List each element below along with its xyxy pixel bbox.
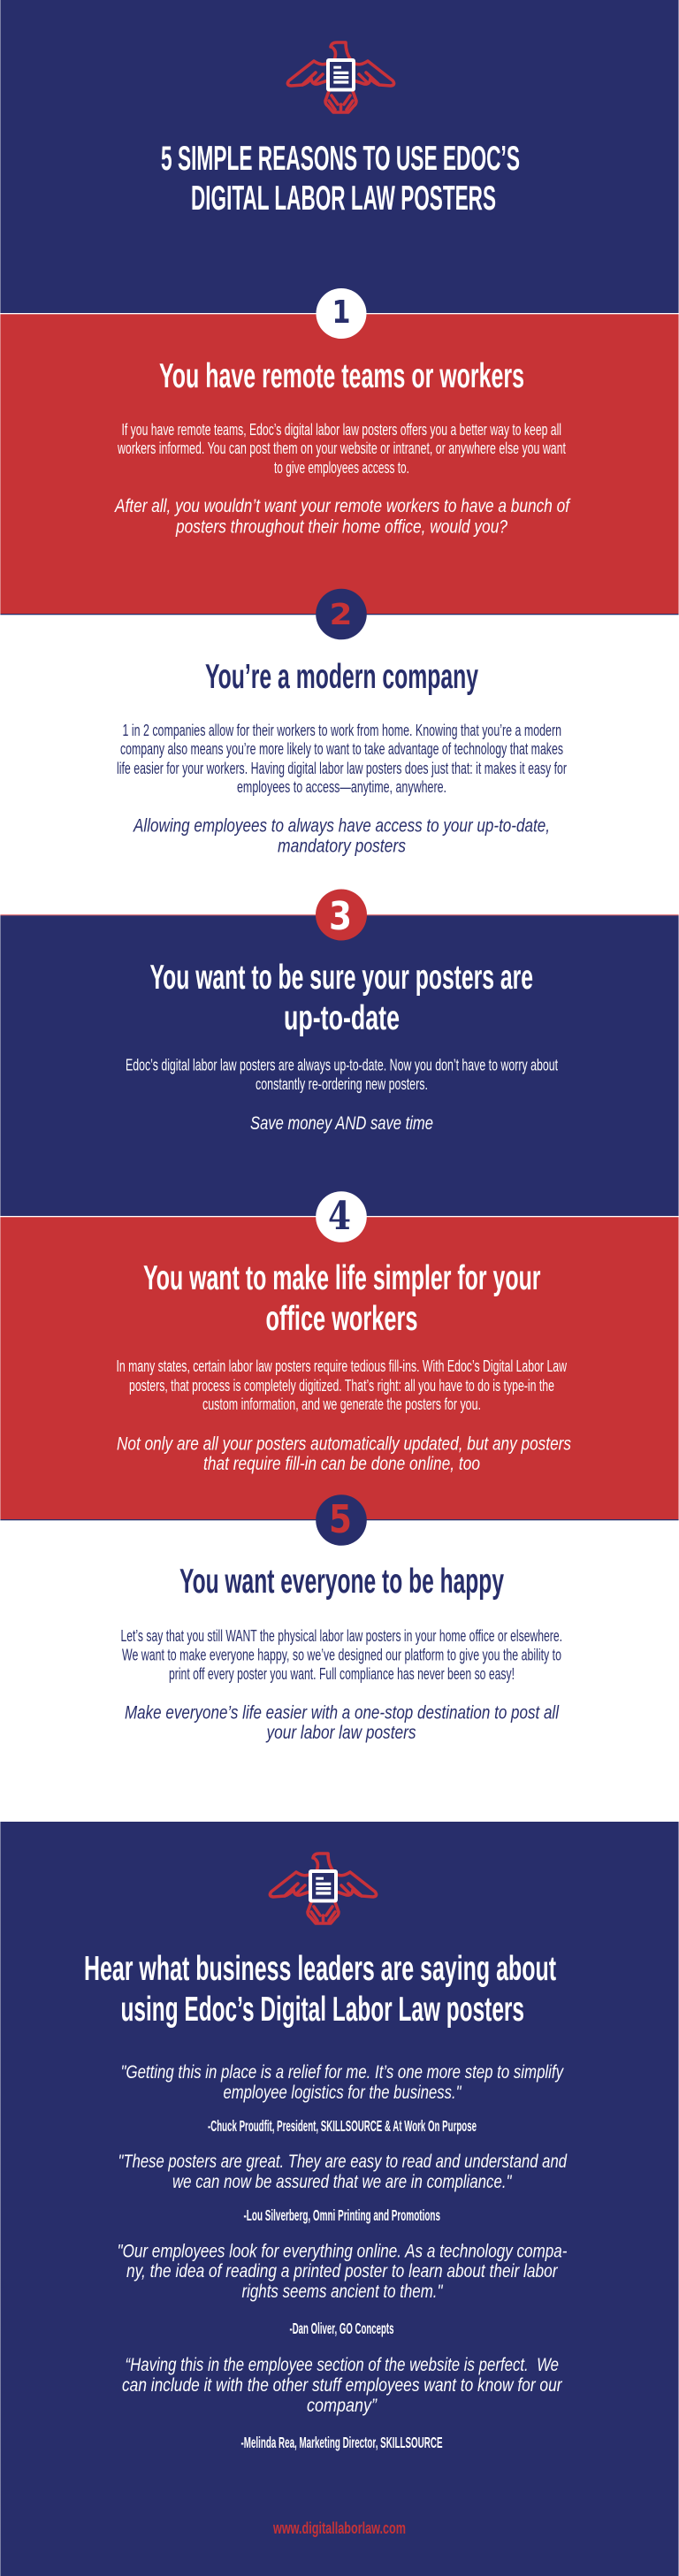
quote: Lou Silverberg: -Lou Silverberg, Omni Printing and Promotions: [244, 2206, 440, 2224]
panel: reason 4 simpler life: [0, 1216, 679, 1519]
text: reason 2 body: employees to access—anytime, anywhere.: [237, 778, 446, 796]
badge: number 4: [316, 1191, 367, 1242]
text: reason 4 body: custom information, and we generate the posters for you.: [202, 1395, 481, 1413]
heading: reason 4: office workers: [265, 1300, 417, 1338]
panel: testimonials: [0, 1822, 679, 2576]
text: reason 4 takeaway: that require fill-in can be done online, too: [203, 1454, 480, 1474]
quote: Chuck Proudfit: -Chuck Proudfit, President, SKILLSOURCE & At Work On Purpose: [208, 2117, 477, 2135]
panel: reason 1 remote teams: [0, 313, 679, 615]
panel: reason 3 up-to-date: [0, 914, 679, 1217]
quote: Dan Oliver: [117, 2241, 568, 2337]
heading: reason 2: You’re a modern company: [205, 658, 478, 696]
quote: Melinda Rea: can include it with the other stuff employees want to know for our: [122, 2375, 562, 2396]
text: reason 5 body: print off every poster you want. Full compliance has never been so easy!: [169, 1665, 515, 1683]
quote: Melinda Rea: “Having this in the employee section of the website is perfect. We: [126, 2355, 559, 2375]
text: reason 2 body: [117, 722, 567, 796]
text: reason 1 body: [117, 421, 566, 477]
heading: reason 5: You want everyone to be happy: [179, 1563, 504, 1601]
quote: Melinda Rea: [122, 2355, 562, 2451]
panel: header: [0, 0, 679, 313]
text: reason 5 takeaway: [125, 1703, 560, 1743]
quote: Dan Oliver: rights seems ancient to them.": [242, 2282, 444, 2302]
icon: eagle with document logo: [287, 42, 394, 112]
quote: Chuck Proudfit: "Getting this in place is a relief for me. It’s one more step to simplify: [120, 2062, 564, 2083]
quote: Chuck Proudfit: [120, 2062, 564, 2135]
panel: reason 2 modern company: [0, 614, 679, 915]
heading: reason 3: up-to-date: [284, 999, 400, 1037]
text: reason 3 body: constantly re-ordering new posters.: [256, 1075, 428, 1093]
badge: number 4: 4: [328, 1194, 351, 1239]
text: reason 3 takeaway: Save money AND save time: [250, 1113, 433, 1134]
badge: number 5: 5: [329, 1497, 352, 1542]
badge: number 3: 3: [329, 894, 352, 939]
quote: Dan Oliver: -Dan Oliver, GO Concepts: [290, 2320, 394, 2337]
quote: Melinda Rea: company”: [307, 2396, 378, 2416]
text: reason 3 body: [126, 1056, 558, 1093]
text: reason 4 takeaway: [117, 1434, 571, 1474]
quote: Lou Silverberg: we can now be assured that we are in compliance.": [172, 2172, 513, 2192]
badge: number 5: [316, 1494, 367, 1546]
heading: reason 4: [143, 1259, 541, 1338]
badge: number 1: [317, 288, 366, 339]
quote: Chuck Proudfit: employee logistics for the business.": [223, 2083, 462, 2103]
heading: testimonials: [84, 1950, 556, 2029]
heading: reason 3: [150, 959, 533, 1037]
text: reason 5 takeaway: your labor law posters: [265, 1723, 416, 1743]
text: reason 4 body: [117, 1357, 568, 1413]
website url: www.digitallaborlaw.com: [272, 2519, 406, 2537]
quote: Lou Silverberg: "These posters are great. They are easy to read and understand and: [118, 2152, 568, 2172]
text: reason 1 takeaway: After all, you wouldn’t want your remote workers to have a bunch of: [113, 496, 571, 516]
icon: eagle with document logo: [270, 1854, 377, 1923]
title: [161, 140, 520, 218]
text: reason 1 takeaway: posters throughout their home office, would you?: [175, 516, 507, 538]
text: reason 2 takeaway: mandatory posters: [278, 837, 406, 856]
badge: number 1: 1: [332, 294, 350, 331]
badge: number 2: [316, 589, 367, 639]
text: reason 1 body: to give employees access to.: [274, 459, 409, 477]
text: reason 2 takeaway: [132, 815, 550, 856]
quote: Melinda Rea: -Melinda Rea, Marketing Director, SKILLSOURCE: [240, 2434, 442, 2451]
text: reason 5 body: [120, 1627, 562, 1683]
text: reason 2 takeaway: Allowing employees to always have access to your up-to-date,: [132, 815, 550, 837]
text: reason 1 takeaway: [113, 496, 571, 538]
text: reason 5 takeaway: Make everyone’s life easier with a one-stop destination to post all: [125, 1703, 560, 1723]
quote: Dan Oliver: "Our employees look for everything online. As a technology compa-: [117, 2241, 568, 2262]
badge: number 2: 2: [329, 597, 352, 631]
panel: reason 5 everyone happy: [0, 1519, 679, 1822]
badge: number 3: [316, 890, 367, 941]
text: reason 4 takeaway: Not only are all your posters automatically updated, but any posters: [117, 1434, 571, 1454]
quote: Lou Silverberg: [118, 2152, 568, 2224]
quote: Dan Oliver: ny, the idea of reading a printed poster to learn about their labor: [126, 2261, 558, 2282]
